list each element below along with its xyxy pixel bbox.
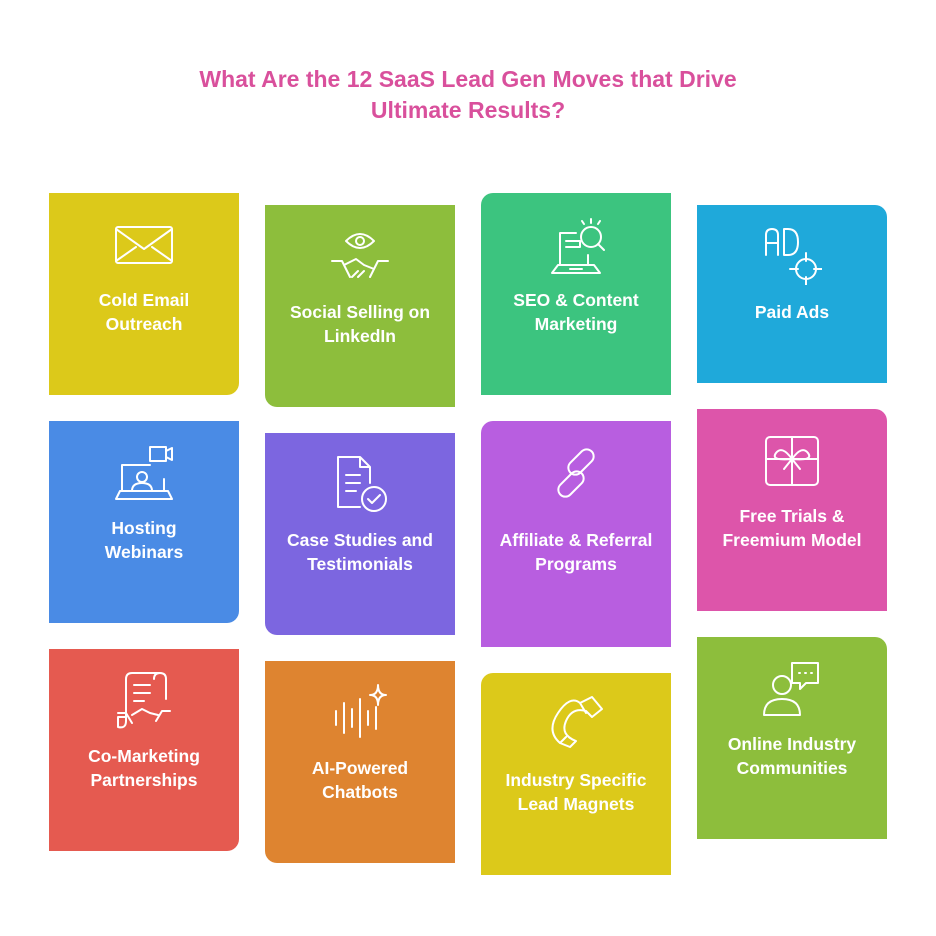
label bbox=[505, 770, 646, 814]
label: Co-Marketing bbox=[88, 746, 200, 766]
label: Social Selling on bbox=[290, 302, 430, 322]
label: AI-Powered bbox=[312, 758, 408, 778]
icon: sound sparkle bbox=[335, 684, 387, 738]
label: Cold Email bbox=[99, 290, 189, 310]
icon: laptop search bbox=[551, 218, 605, 274]
label: LinkedIn bbox=[324, 326, 396, 346]
label: Paid Ads bbox=[755, 302, 829, 322]
card: co-marketing bbox=[49, 649, 239, 851]
icon: laptop camera bbox=[115, 446, 173, 500]
label bbox=[88, 746, 200, 790]
label: Freemium Model bbox=[722, 530, 862, 550]
title: What Are the 12 SaaS Lead Gen Moves that Drive bbox=[199, 66, 737, 92]
label: Case Studies and bbox=[287, 530, 433, 550]
label: SEO & Content bbox=[513, 290, 639, 310]
label: Online Industry bbox=[728, 734, 856, 754]
label: Free Trials & bbox=[739, 506, 845, 526]
icon: document check bbox=[337, 456, 387, 512]
icon: scroll handshake bbox=[117, 672, 171, 728]
label bbox=[722, 506, 862, 550]
card: communities bbox=[697, 637, 887, 839]
card: lead magnets bbox=[481, 673, 671, 875]
card: chatbots bbox=[265, 661, 455, 863]
label bbox=[728, 734, 856, 778]
label bbox=[500, 530, 652, 574]
title bbox=[199, 66, 737, 123]
title: Ultimate Results? bbox=[371, 97, 565, 123]
label bbox=[312, 758, 408, 802]
card: case studies bbox=[265, 433, 455, 635]
label: Lead Magnets bbox=[518, 794, 634, 814]
label: Webinars bbox=[105, 542, 183, 562]
card: social selling bbox=[265, 205, 455, 407]
card: cold email bbox=[49, 193, 239, 395]
label: Marketing bbox=[535, 314, 617, 334]
icon: magnet bbox=[551, 696, 603, 748]
card: free trials bbox=[697, 409, 887, 611]
label bbox=[287, 530, 433, 574]
label bbox=[290, 302, 430, 346]
label bbox=[104, 518, 183, 562]
label: Affiliate & Referral bbox=[500, 530, 652, 550]
card: affiliate bbox=[481, 421, 671, 647]
label: Communities bbox=[737, 758, 847, 778]
card: seo bbox=[481, 193, 671, 395]
label bbox=[513, 290, 639, 334]
label: Industry Specific bbox=[505, 770, 646, 790]
label: Outreach bbox=[106, 314, 182, 334]
label: Programs bbox=[535, 554, 617, 574]
icon: AD target bbox=[765, 228, 822, 285]
icon: link bbox=[557, 448, 595, 498]
label: Testimonials bbox=[307, 554, 413, 574]
card: paid ads bbox=[697, 205, 887, 383]
icon: gift bbox=[765, 436, 819, 486]
label bbox=[99, 290, 189, 334]
icon: envelope bbox=[115, 226, 173, 264]
label: Chatbots bbox=[322, 782, 398, 802]
icon: eye handshake bbox=[331, 233, 389, 278]
label: Hosting bbox=[111, 518, 177, 538]
label: Partnerships bbox=[90, 770, 197, 790]
icon: person chat bbox=[763, 662, 819, 716]
card: webinars bbox=[49, 421, 239, 623]
